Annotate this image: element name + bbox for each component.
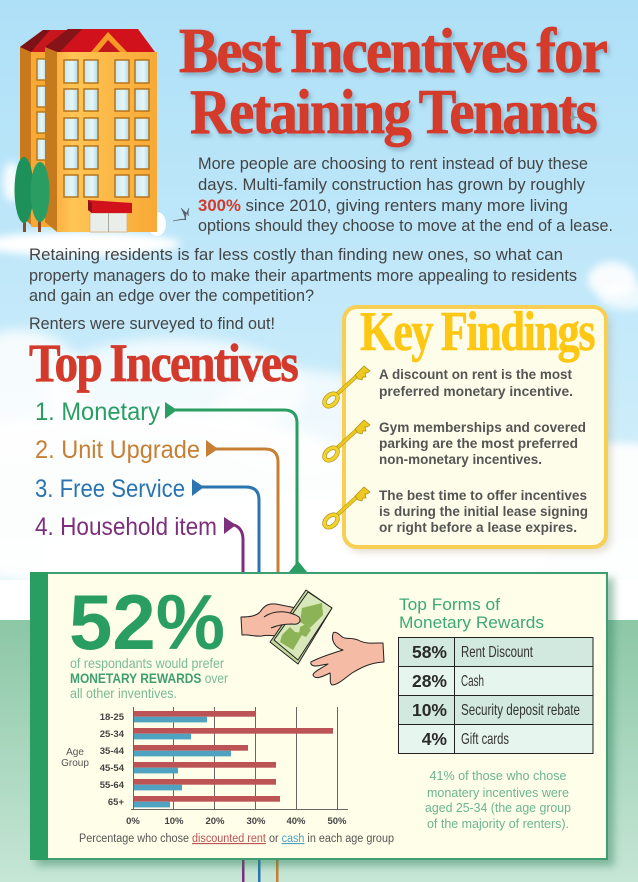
finding 3 — [379, 488, 588, 535]
finding 2: parking are the most preferred — [379, 436, 578, 451]
intro text: days. Multi-family construction has grown by roughly — [198, 176, 586, 194]
retention paragraph — [29, 246, 577, 333]
arrow: unit upgrade — [206, 440, 278, 572]
axis title — [61, 747, 89, 769]
chart caption: Percentage who chose discounted rent or cash in each age group — [79, 833, 394, 845]
table: monetary rewards: Rent Discount — [461, 644, 533, 661]
note: 41 percent: 41% of those who chose — [430, 768, 566, 783]
note: 41 percent — [425, 768, 571, 831]
table: monetary rewards: Gift cards — [461, 731, 509, 748]
icon: key 1 — [322, 366, 370, 409]
red bars: discounted rent — [134, 711, 333, 802]
list of top incentives: 1. Monetary — [35, 398, 160, 426]
stat caption: all other inventives. — [70, 685, 177, 701]
finding 3: is during the initial lease signing — [379, 504, 588, 519]
retention paragraph: Renters were surveyed to find out! — [29, 315, 275, 333]
back tower — [20, 30, 68, 227]
title: Retaining Tenants — [190, 76, 597, 147]
blue bars: cash — [134, 717, 231, 807]
table: monetary rewards: Cash — [461, 673, 484, 690]
arrow: free service — [192, 479, 259, 572]
heading: top forms: Top Forms of — [399, 595, 500, 614]
age labels: 18-25 — [100, 712, 125, 723]
icon: key 3 — [322, 487, 370, 530]
intro text: More people are choosing to rent instead of buy these — [198, 155, 588, 173]
trees — [14, 157, 50, 232]
intro text: options should they choose to move at the end of a lease. — [198, 217, 613, 235]
icon: key 2 — [322, 420, 370, 463]
icon: hands exchanging money — [241, 590, 384, 685]
finding 1 — [379, 367, 573, 399]
age labels: 25-34 — [100, 729, 125, 740]
age labels — [100, 712, 125, 808]
arrowhead on card — [289, 561, 307, 572]
finding 1: A discount on rent is the most — [379, 367, 572, 382]
table: monetary rewards: Security deposit rebate — [461, 702, 580, 719]
table: monetary rewards: 10% — [412, 700, 447, 720]
list of top incentives: 3. Free Service — [35, 475, 185, 503]
stat caption: MONETARY REWARDS over — [70, 670, 228, 686]
finding 3: or right before a lease expires. — [379, 520, 577, 535]
front tower — [45, 29, 157, 232]
heading: top incentives: Top Incentives — [29, 333, 298, 393]
building illustration — [14, 29, 157, 232]
age labels: 35-44 — [100, 746, 125, 757]
note: 41 percent: monatery incentives were — [427, 785, 569, 800]
age labels: 55-64 — [100, 780, 125, 791]
table: monetary rewards — [398, 638, 593, 754]
icon: bird — [173, 208, 189, 221]
connectors — [165, 402, 297, 572]
arrow: household item — [224, 517, 243, 572]
axis ticks: 30% — [246, 816, 266, 827]
axis ticks: 10% — [164, 816, 184, 827]
intro text: 300% since 2010, giving renters many more living — [198, 197, 568, 215]
panel: key findings — [322, 301, 611, 552]
finding 2: Gym memberships and covered — [379, 420, 586, 435]
retention paragraph: property managers do to make their apartments more appealing to residents — [29, 267, 577, 285]
stat caption — [70, 655, 228, 701]
intro text — [198, 155, 613, 235]
finding 2 — [379, 420, 586, 467]
table: monetary rewards: 58% — [412, 642, 447, 662]
list of top incentives — [35, 398, 217, 541]
stat caption: of respondants would prefer — [70, 655, 224, 671]
background: clouds — [0, 162, 638, 687]
axis ticks: 0% — [126, 816, 140, 827]
axis ticks: 20% — [205, 816, 225, 827]
axis ticks — [126, 816, 347, 827]
age labels: 65+ — [108, 797, 124, 808]
age labels: 45-54 — [100, 763, 125, 774]
table: monetary rewards: 4% — [422, 729, 447, 749]
big stat: 52% — [69, 578, 225, 666]
finding 3: The best time to offer incentives — [379, 488, 587, 503]
finding 1: preferred monetary incentive. — [379, 384, 573, 399]
title — [179, 15, 607, 147]
retention paragraph: and gain an edge over the competition? — [29, 287, 314, 305]
title: Best Incentives for — [179, 15, 607, 86]
retention paragraph: Retaining residents is far less costly than finding new ones, so what can — [29, 246, 563, 264]
table: monetary rewards: 28% — [412, 671, 447, 691]
heading: top forms: Monetary Rewards — [399, 613, 544, 632]
list of top incentives: 2. Unit Upgrade — [35, 436, 200, 464]
arrow: monetary — [165, 402, 297, 572]
axis ticks: 50% — [327, 816, 347, 827]
finding 2: non-monetary incentives. — [379, 452, 542, 467]
axis ticks: 40% — [286, 816, 306, 827]
icon: small bird on title — [570, 110, 580, 121]
background: green hill — [0, 620, 638, 882]
panel: monetary card — [30, 561, 614, 866]
door and awning — [88, 200, 132, 232]
heading: top forms — [399, 595, 544, 632]
bar chart: age groups — [61, 707, 394, 845]
note: 41 percent: aged 25-34 (the age group — [425, 800, 571, 815]
gridlines — [131, 707, 348, 810]
note: 41 percent: of the majority of renters). — [427, 816, 569, 831]
axis title: Age — [66, 747, 84, 758]
axis title: Group — [61, 758, 89, 769]
lines below card — [242, 856, 278, 882]
list of top incentives: 4. Household item — [35, 513, 217, 541]
windows — [64, 60, 149, 197]
